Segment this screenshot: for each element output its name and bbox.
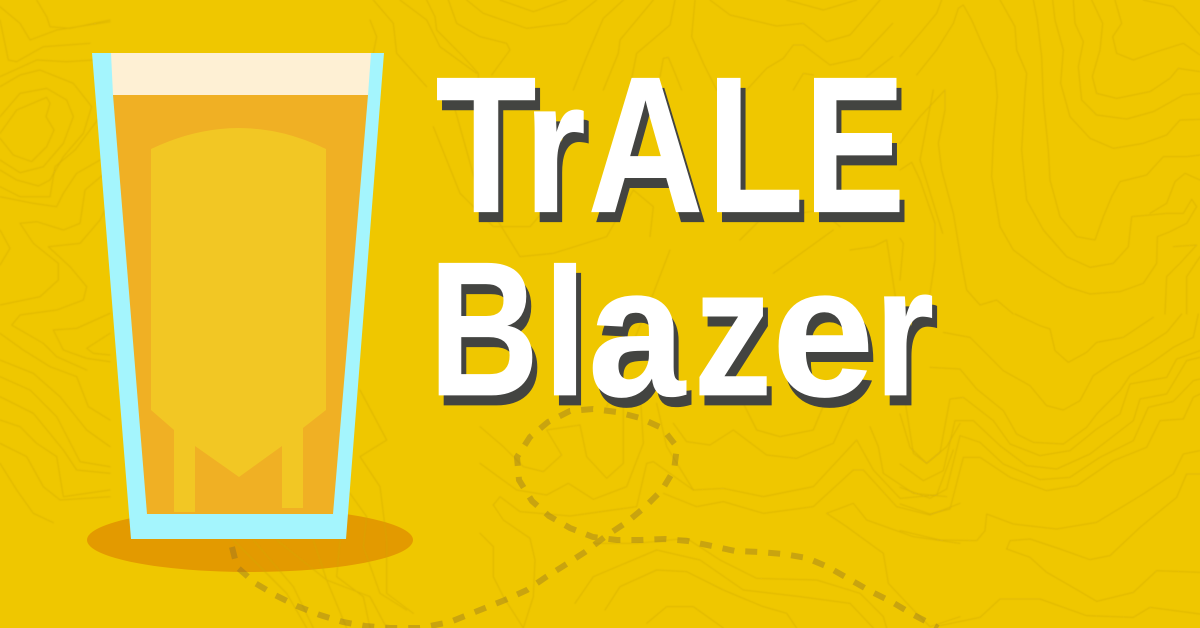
- title line 2: a: [588, 229, 687, 436]
- foam: [111, 53, 371, 95]
- beer: [113, 95, 368, 514]
- title line 1: L: [707, 37, 804, 254]
- glass shadow: [87, 508, 413, 572]
- title line 1: E: [804, 37, 905, 254]
- title line 2: e: [772, 229, 874, 436]
- title line 1: T: [436, 37, 536, 254]
- fermenter tank silhouette: [151, 128, 326, 512]
- title line 2: r: [874, 228, 934, 435]
- title line 1: A: [588, 37, 703, 254]
- title line 2: z: [694, 229, 772, 434]
- title: TrALE Blazer: [429, 37, 934, 436]
- glass body: [92, 53, 384, 539]
- title line 2: l: [543, 230, 587, 434]
- trail: dashed loop and winding path: [232, 409, 938, 628]
- pint glass: [92, 53, 384, 539]
- title line 2: B: [429, 222, 539, 436]
- title line 1: r: [524, 42, 586, 253]
